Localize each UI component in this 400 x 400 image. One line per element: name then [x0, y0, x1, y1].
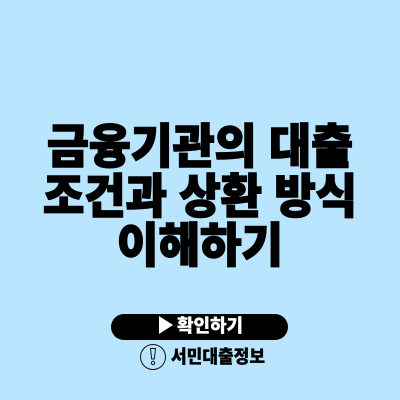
- title: [43, 120, 357, 272]
- icon: exclamation circle: [140, 344, 166, 370]
- title: 금융기관의 대출: [47, 120, 353, 173]
- icon: play triangle: [159, 316, 173, 334]
- brand row: [140, 344, 265, 370]
- confirm button: [111, 314, 288, 340]
- brand name: 서민대출정보: [171, 347, 265, 367]
- button label: 확인하기: [177, 315, 243, 336]
- title: 이해하기: [117, 219, 283, 272]
- title: 조건과 상환 방식: [43, 170, 357, 223]
